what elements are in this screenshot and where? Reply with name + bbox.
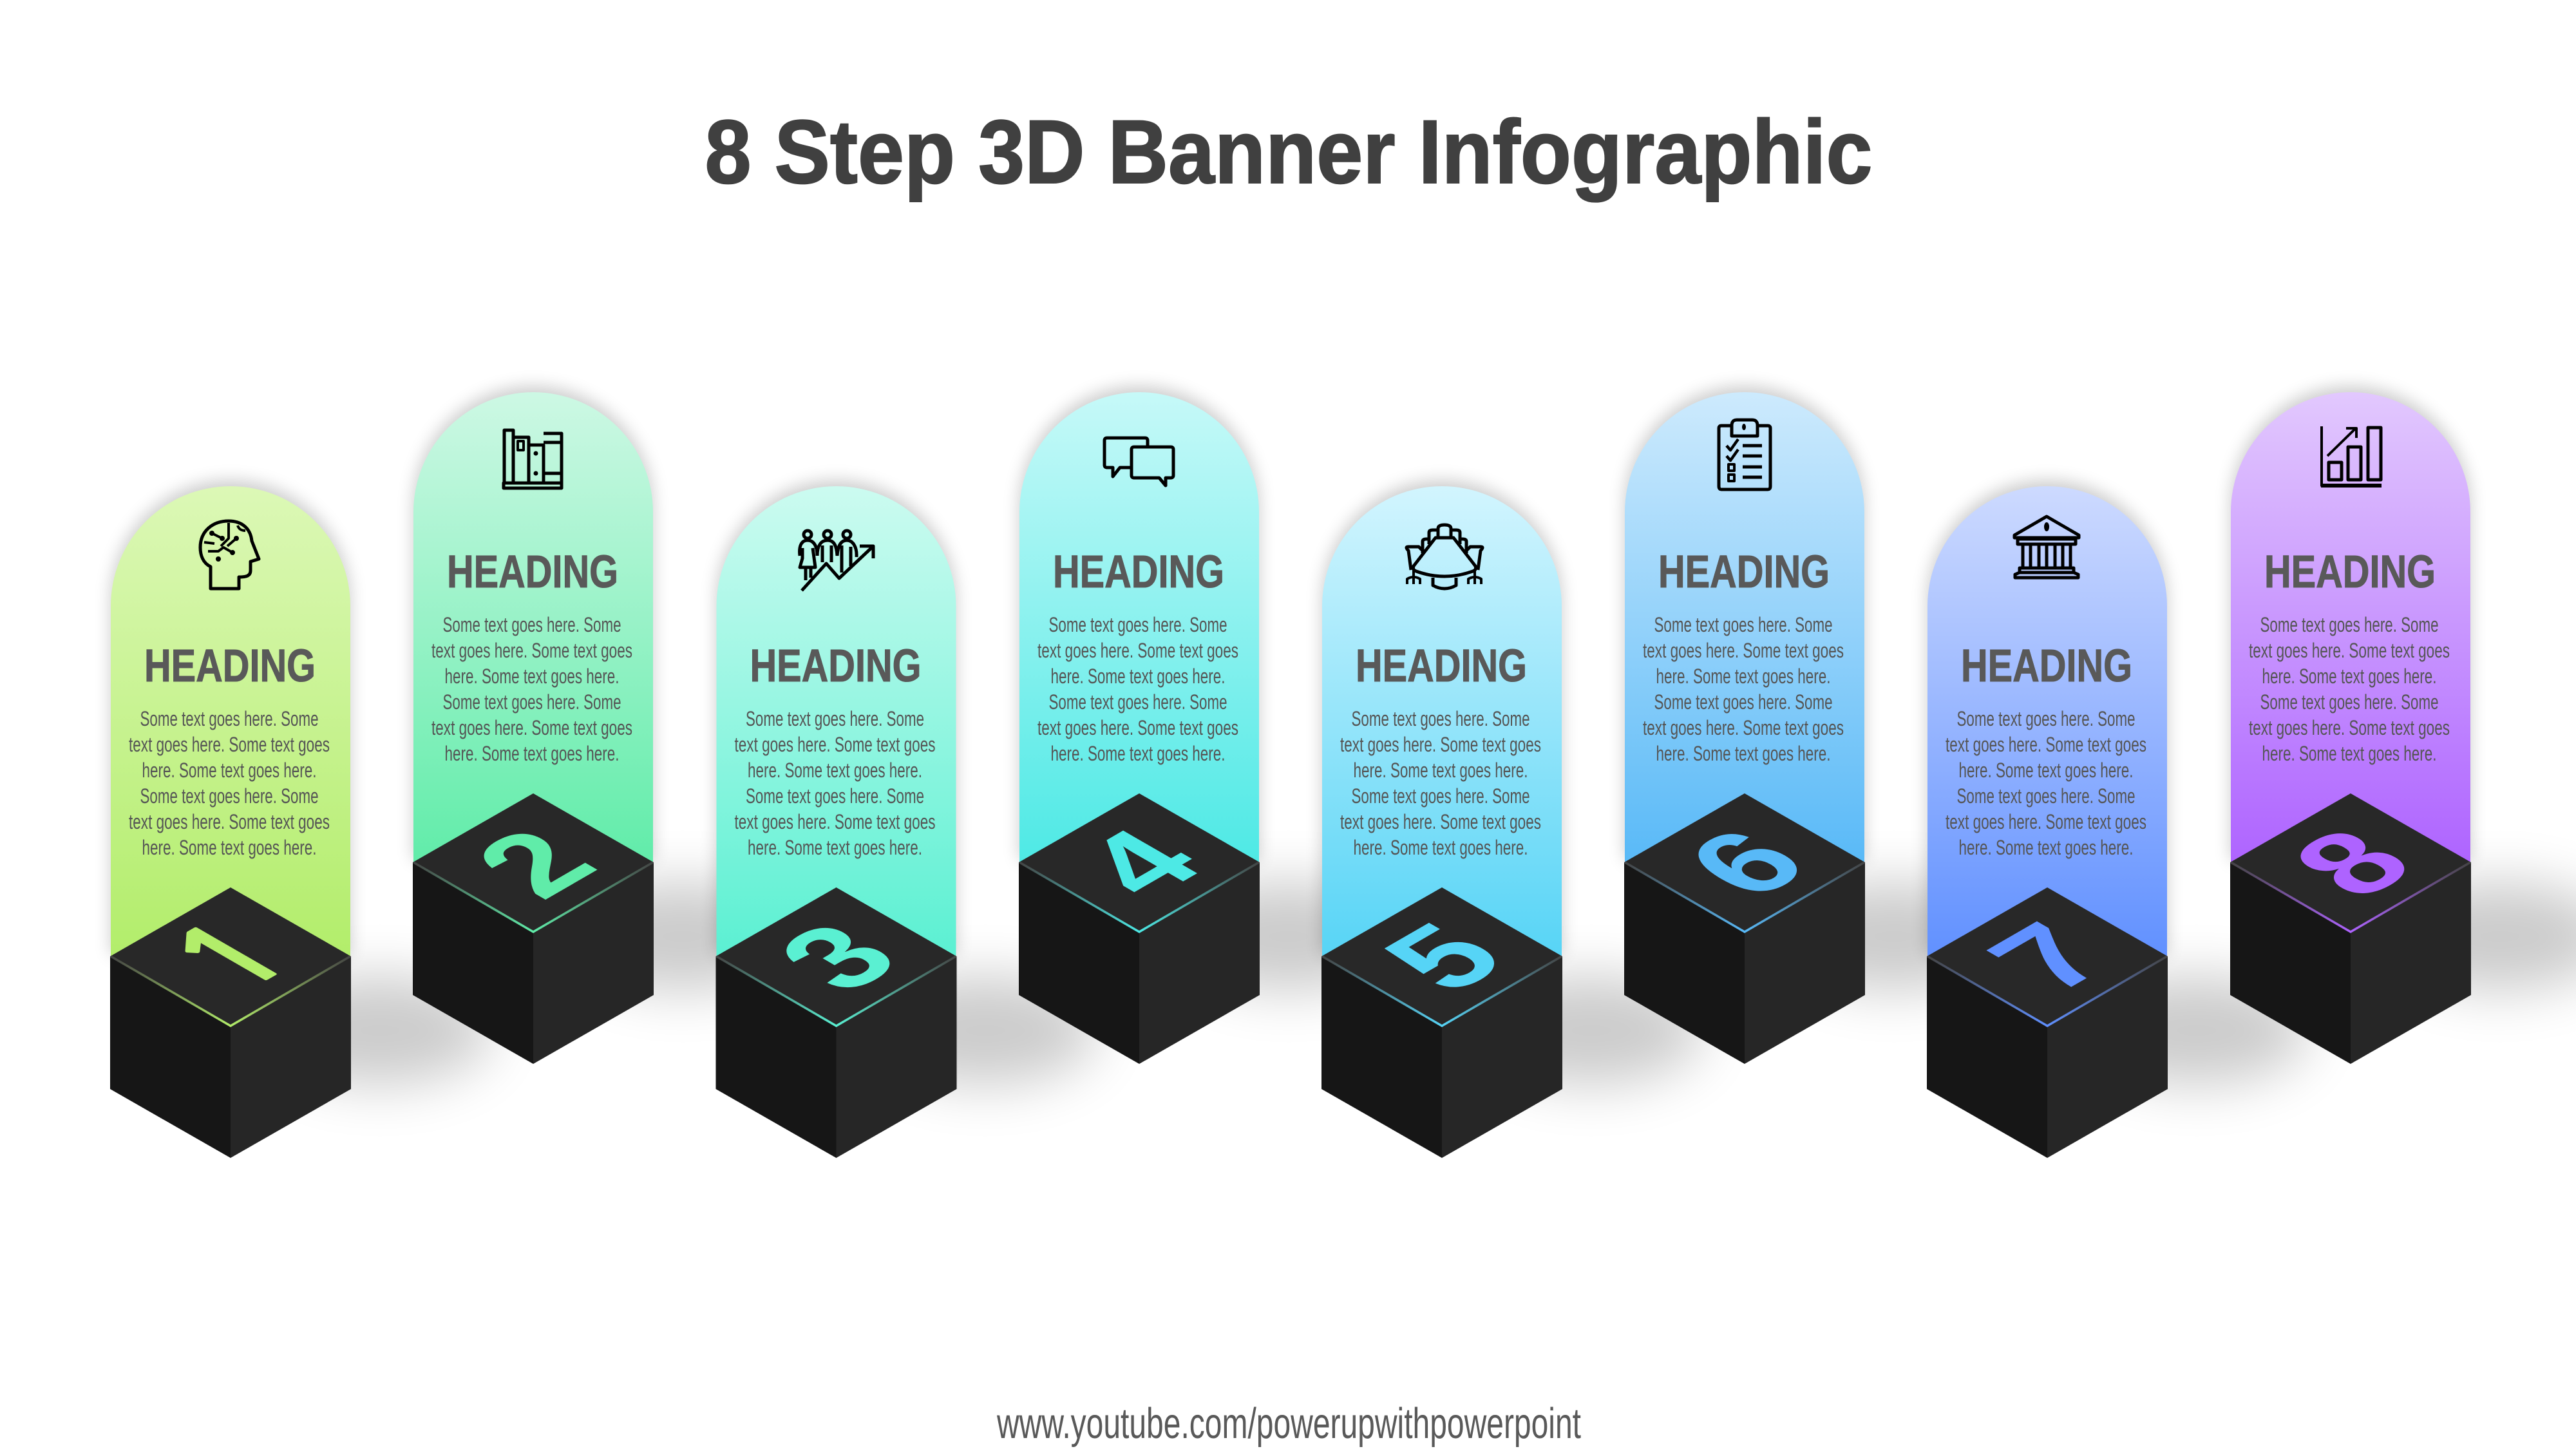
body text 2: text goes here. Some text goes (431, 639, 632, 662)
cube 3 with number: 3 (747, 905, 927, 1009)
banner panel 7 (1927, 480, 2167, 960)
banner panel 2 (413, 386, 653, 866)
body text 8: here. Some text goes here. (2262, 742, 2437, 765)
body text 6: Some text goes here. Some (1654, 613, 1833, 636)
body text 5: here. Some text goes here. (1354, 836, 1528, 859)
heading 8: HEADING (2264, 547, 2436, 598)
heading 6: HEADING (1658, 547, 1830, 598)
body text 7: Some text goes here. Some (1956, 784, 2136, 808)
body text 6: text goes here. Some text goes (1643, 639, 1844, 662)
step 6 banner (1624, 386, 1865, 1064)
body text 2: text goes here. Some text goes (431, 716, 632, 739)
body text 3: Some text goes here. Some (746, 707, 924, 730)
body text 5: Some text goes here. Some (1351, 707, 1530, 730)
step 5 banner (1321, 480, 1562, 1158)
banner panel 8 (2231, 386, 2470, 866)
ground shadows behind the cubes (267, 882, 2576, 1085)
body text 4: Some text goes here. Some (1048, 690, 1227, 714)
body text 1 (129, 707, 330, 859)
heading 7: HEADING (1961, 641, 2132, 692)
banner panel 3 (716, 480, 956, 960)
body text 5: text goes here. Some text goes (1340, 733, 1541, 756)
cube 6 with number (1624, 793, 1865, 1064)
body text 5: Some text goes here. Some (1351, 784, 1530, 808)
body text 2: Some text goes here. Some (443, 690, 621, 714)
body text 4: here. Some text goes here. (1051, 742, 1225, 765)
icon: head with circuits (200, 521, 259, 589)
body text 4 (1037, 613, 1238, 765)
body text 1: here. Some text goes here. (142, 836, 317, 859)
heading 1: HEADING (144, 641, 316, 692)
body text 8: here. Some text goes here. (2262, 665, 2437, 688)
heading 3: HEADING (750, 641, 921, 692)
step 1 banner (110, 480, 351, 1158)
cube 4 with number: 4 (1050, 811, 1231, 915)
body text 1: here. Some text goes here. (142, 759, 317, 782)
body text 1: text goes here. Some text goes (129, 733, 330, 756)
cube 3 with number (716, 887, 957, 1158)
body text 5 (1340, 707, 1541, 859)
body text 2: here. Some text goes here. (444, 665, 620, 688)
step 2 banner (413, 386, 654, 1064)
body text 6: text goes here. Some text goes (1643, 716, 1844, 739)
body text 7: here. Some text goes here. (1959, 836, 2133, 859)
body text 8: text goes here. Some text goes (2249, 639, 2450, 662)
cube 6 with number: 6 (1656, 811, 1836, 915)
heading 5: HEADING (1356, 641, 1527, 692)
cube 7 with number (1927, 887, 2168, 1158)
banner panel 5 (1322, 480, 1562, 960)
body text 3: here. Some text goes here. (748, 759, 922, 782)
body text 7: Some text goes here. Some (1956, 707, 2136, 730)
heading 2: HEADING (447, 547, 618, 598)
step 7 banner (1927, 480, 2168, 1158)
body text 6: here. Some text goes here. (1656, 665, 1830, 688)
body text 2: here. Some text goes here. (444, 742, 620, 765)
body text 3 (734, 707, 935, 859)
body text 4: text goes here. Some text goes (1037, 716, 1238, 739)
icon: clipboard checklist (1719, 420, 1770, 489)
title: 8 Step 3D Banner Infographic (705, 101, 1873, 202)
step 3 banner (716, 480, 957, 1158)
icon: bank building (2014, 516, 2079, 578)
body text 7: text goes here. Some text goes (1946, 810, 2146, 833)
banner panel 6 (1625, 386, 1864, 866)
body text 8: Some text goes here. Some (2260, 613, 2438, 636)
body text 7: text goes here. Some text goes (1946, 733, 2146, 756)
step 8 banner (2230, 386, 2471, 1064)
body text 3: text goes here. Some text goes (734, 810, 935, 833)
body text 6: here. Some text goes here. (1656, 742, 1830, 765)
step 4 banner (1019, 386, 1260, 1064)
icon: conference table (1406, 525, 1482, 589)
body text 3: text goes here. Some text goes (734, 733, 935, 756)
body text 5: here. Some text goes here. (1354, 759, 1528, 782)
icon: chat bubbles (1104, 438, 1173, 486)
cube 5 with number: 5 (1353, 905, 1533, 1009)
cube 1 with number (110, 887, 351, 1158)
body text 2 (431, 613, 632, 765)
body text 1: text goes here. Some text goes (129, 810, 330, 833)
body text 7 (1946, 707, 2146, 859)
cube 1 with number: 1 (146, 907, 318, 1007)
cube 2 with number (413, 793, 654, 1064)
body text 4: Some text goes here. Some (1048, 613, 1227, 636)
body text 2: Some text goes here. Some (443, 613, 621, 636)
cube 2 with number: 2 (444, 811, 625, 915)
cube 5 with number (1321, 887, 1562, 1158)
heading 4: HEADING (1053, 547, 1224, 598)
footer url: www.youtube.com/powerupwithpowerpoint (996, 1399, 1581, 1448)
body text 8: text goes here. Some text goes (2249, 716, 2450, 739)
body text 3: Some text goes here. Some (746, 784, 924, 808)
cube 7 with number: 7 (1958, 905, 2139, 1009)
banner panel 4 (1019, 386, 1259, 866)
cube 8 with number (2230, 793, 2471, 1064)
icon: team and rising arrow (800, 531, 873, 591)
banner panel 1 (111, 480, 350, 960)
cube 8 with number: 8 (2262, 811, 2442, 915)
body text 6: Some text goes here. Some (1654, 690, 1833, 714)
body text 8 (2249, 613, 2450, 765)
body text 6 (1643, 613, 1844, 765)
icon: books (504, 430, 562, 488)
icon: growth bar chart (2321, 426, 2382, 486)
cube 4 with number (1019, 793, 1260, 1064)
body text 3: here. Some text goes here. (748, 836, 922, 859)
body text 8: Some text goes here. Some (2260, 690, 2438, 714)
body text 7: here. Some text goes here. (1959, 759, 2133, 782)
body text 5: text goes here. Some text goes (1340, 810, 1541, 833)
body text 1: Some text goes here. Some (140, 707, 318, 730)
body text 4: text goes here. Some text goes (1037, 639, 1238, 662)
body text 4: here. Some text goes here. (1051, 665, 1225, 688)
body text 1: Some text goes here. Some (140, 784, 318, 808)
